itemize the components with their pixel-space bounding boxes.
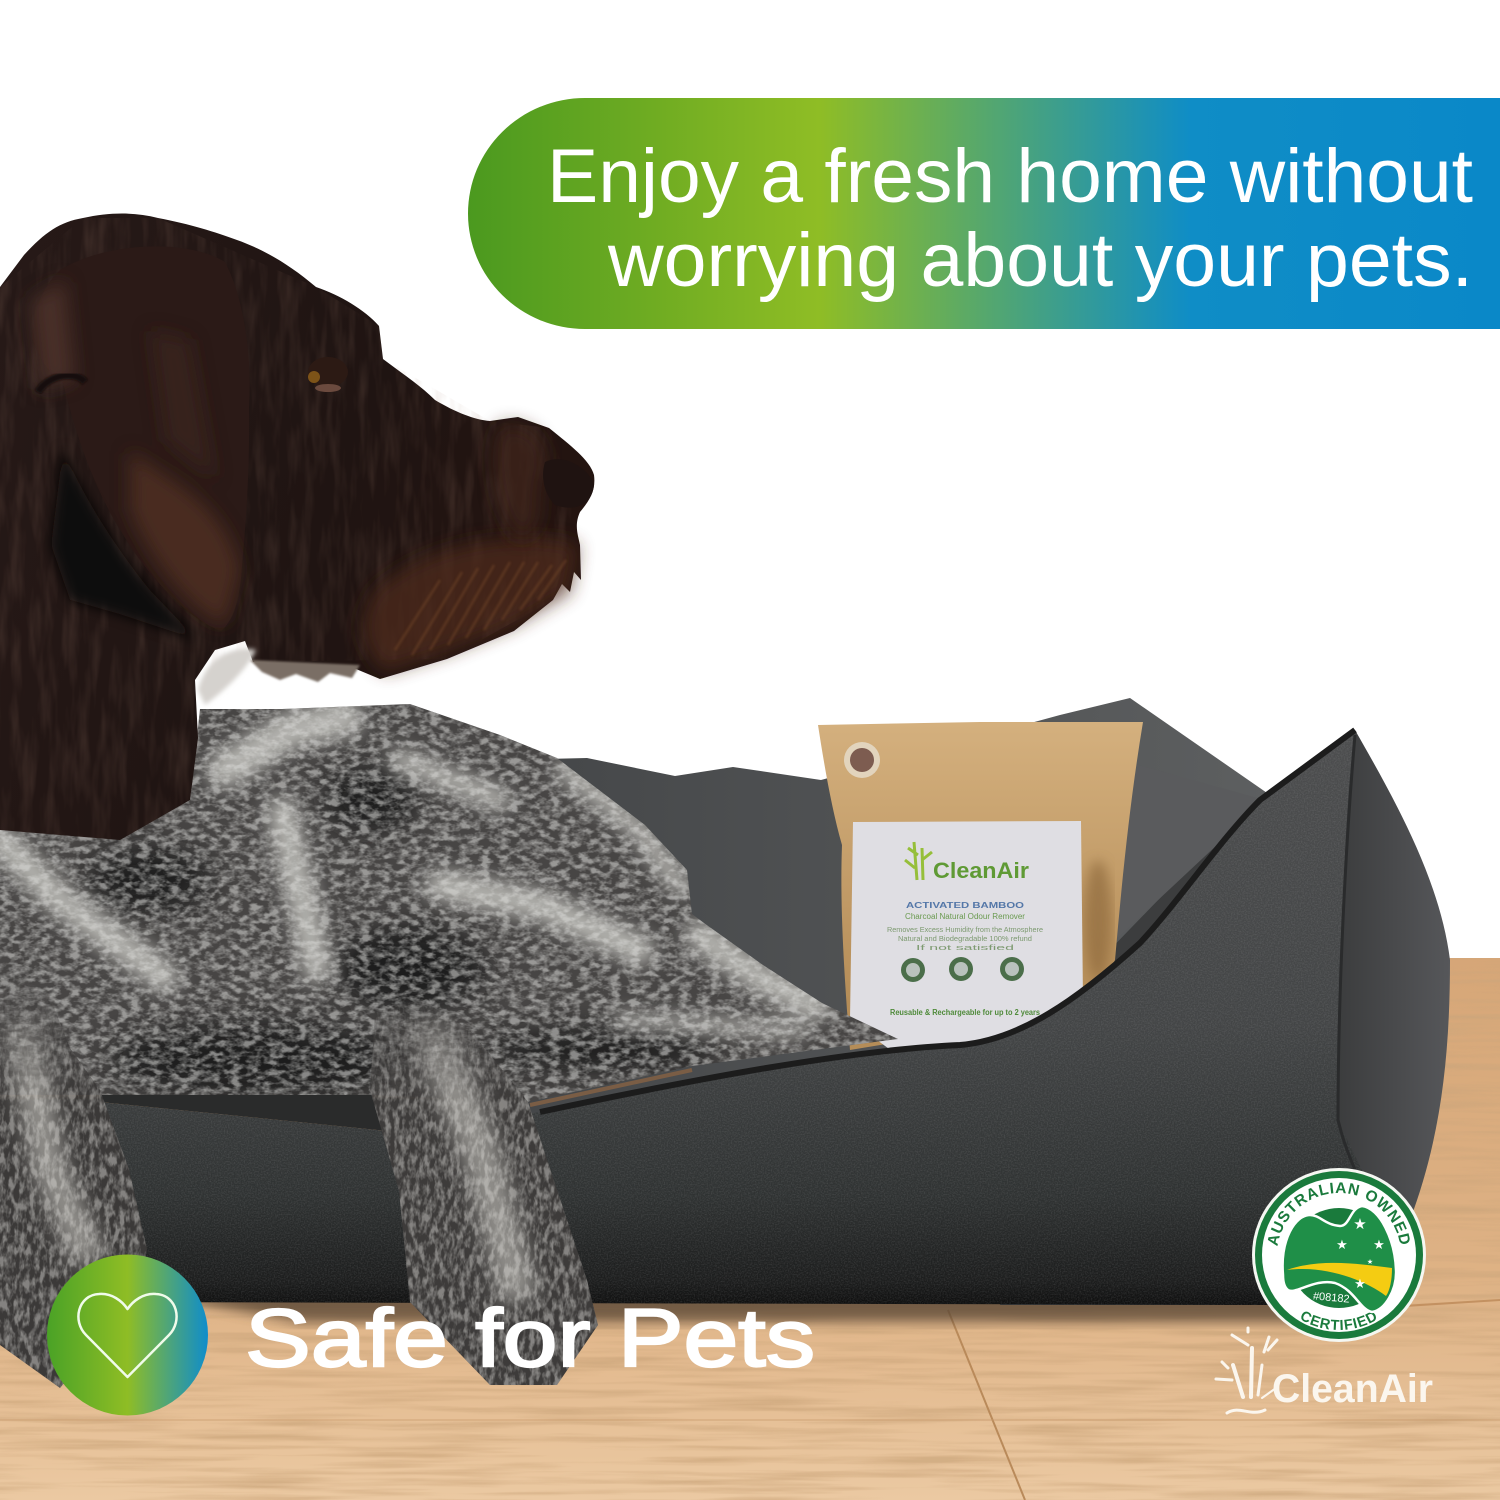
bag body xyxy=(818,722,1143,1050)
jaw fringe xyxy=(250,660,360,682)
headline text: worrying about your pets. xyxy=(607,218,1473,303)
dog body xyxy=(0,704,898,1102)
safe for pets label: Safe for Pets xyxy=(245,1293,815,1384)
badge stars: ★ xyxy=(1353,1216,1367,1233)
dog head and neck xyxy=(0,214,594,840)
ear xyxy=(32,246,250,631)
bag bottom text: Reusable & Rechargeable for up to 2 years xyxy=(890,1008,1040,1017)
badge stars: ★ xyxy=(1336,1237,1348,1252)
bed interior right wall xyxy=(1110,760,1265,945)
right corner bolster xyxy=(1000,730,1450,1305)
bag grommet xyxy=(844,742,880,778)
badge stars: ★ xyxy=(1367,1258,1373,1266)
cleanair logo xyxy=(1216,1328,1433,1413)
ear dark fold xyxy=(51,448,198,640)
bed back rim xyxy=(500,698,1350,1120)
beard strands xyxy=(395,560,566,655)
badge stars: ★ xyxy=(1354,1276,1366,1291)
badge yellow swoosh xyxy=(1287,1263,1392,1296)
logo wordmark: CleanAir xyxy=(1272,1367,1433,1411)
neck white fur xyxy=(198,649,256,705)
brown bed lining sliver xyxy=(530,1070,692,1105)
headline text: Enjoy a fresh home without xyxy=(547,134,1473,219)
bag small text: ACTIVATED BAMBOO xyxy=(906,901,1024,910)
badge map xyxy=(1283,1206,1396,1312)
muzzle beard xyxy=(363,539,578,672)
left cushion piece xyxy=(100,1090,387,1131)
badge stars: ★ xyxy=(1373,1237,1385,1252)
head fur streaks xyxy=(0,218,578,840)
australian owned badge xyxy=(1252,1168,1426,1342)
icon: heart circle xyxy=(47,1254,208,1416)
headline banner xyxy=(468,98,1500,329)
bag logo: CleanAir xyxy=(933,858,1029,883)
front bolster xyxy=(100,730,1395,1305)
inner lip xyxy=(540,730,1355,1112)
bag small text: Removes Excess Humidity from the Atmosphere xyxy=(887,927,1043,934)
muzzle brown tuft xyxy=(493,424,546,540)
bag icons xyxy=(901,957,1024,982)
badge text: CERTIFIED xyxy=(1301,1312,1376,1330)
bag small text: Charcoal Natural Odour Remover xyxy=(905,912,1025,921)
dog bed back xyxy=(95,698,1450,1322)
dog right front leg xyxy=(370,999,598,1385)
headline text xyxy=(547,134,1473,303)
dog left front leg xyxy=(0,972,147,1388)
logo bamboo xyxy=(1216,1328,1277,1413)
dog xyxy=(0,214,920,1388)
bag logo xyxy=(905,842,1029,883)
body dark patches xyxy=(90,770,720,1095)
bag stain xyxy=(1084,860,1112,980)
badge number: #08182 xyxy=(1312,1290,1350,1306)
eye xyxy=(308,357,348,392)
product bag xyxy=(818,722,1143,1060)
ear notch xyxy=(38,375,85,392)
body light streaks xyxy=(0,718,815,1030)
ear highlights xyxy=(30,280,240,625)
nose xyxy=(543,459,594,508)
bag small text xyxy=(887,901,1043,952)
bolster texture xyxy=(100,730,1395,1305)
bolster seam highlight xyxy=(1338,735,1395,1240)
dog bed front xyxy=(100,730,1395,1305)
badge text: AUSTRALIAN OWNED xyxy=(1268,1182,1410,1246)
badge stars xyxy=(1336,1216,1385,1291)
bag small text: Natural and Biodegradable 100% refund xyxy=(898,936,1032,943)
fur speckle xyxy=(0,704,898,1102)
badge text xyxy=(1268,1182,1410,1330)
bag label xyxy=(850,821,1083,1060)
wooden floor xyxy=(0,958,1500,1500)
bag small text: If not satisfied xyxy=(916,945,1014,952)
bed shadow xyxy=(95,1250,1400,1322)
